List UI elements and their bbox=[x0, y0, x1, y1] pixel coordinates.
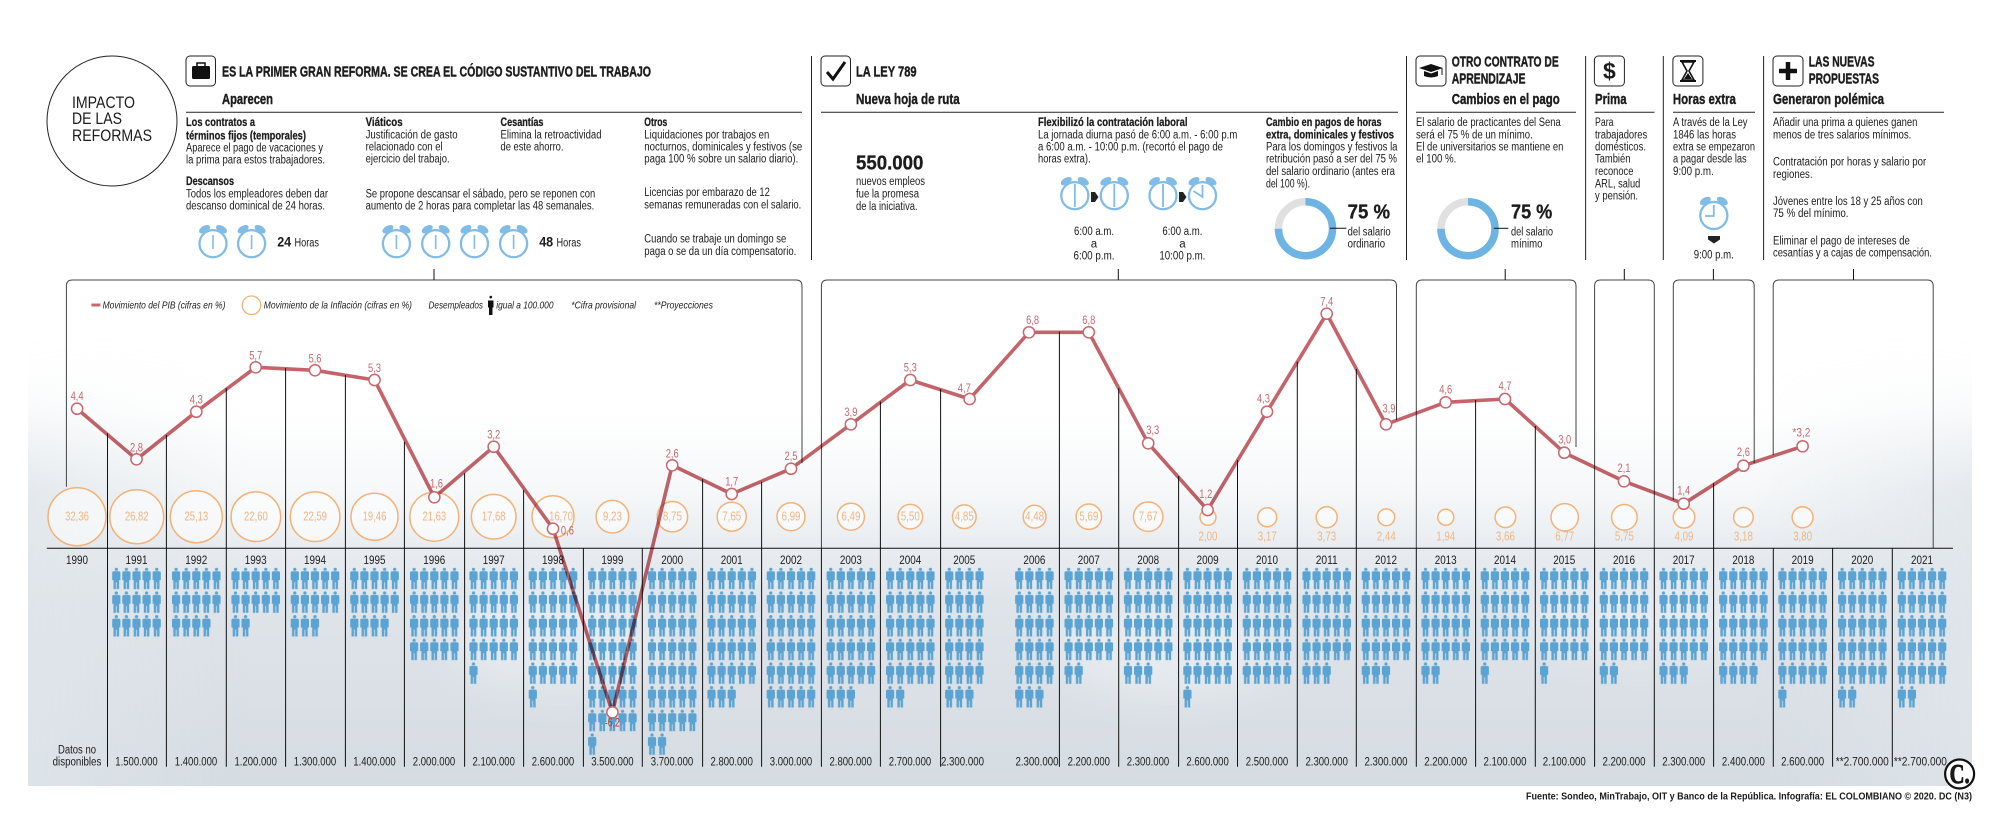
text block: otros: Otros bbox=[644, 117, 667, 129]
panel: las nuevas propuestas bbox=[1773, 55, 1944, 259]
GDP value labels: 3,0 bbox=[1558, 432, 1571, 446]
year labels: 2021 bbox=[1911, 553, 1933, 567]
icon: clocks 48 horas: Horas bbox=[556, 238, 581, 250]
unemployed counts: 2.300.000 bbox=[1127, 756, 1169, 768]
text block: practicantes bbox=[1416, 117, 1563, 166]
GDP value labels: 3,9 bbox=[844, 405, 858, 419]
inflation bubbles: 6,99 bbox=[782, 510, 801, 524]
panel: horas extra bbox=[1673, 56, 1755, 262]
icon: dollar sign: $ bbox=[1603, 58, 1616, 84]
inflation bubbles: 21,63 bbox=[422, 510, 446, 524]
text block: flexibilizo la contratacion: a 6:00 a.m. - 10:00 p.m. (recortó el pago de bbox=[1038, 142, 1223, 154]
GDP value labels: 6,8 bbox=[1082, 313, 1096, 327]
text block: practicantes: El de universitarios se mantiene en bbox=[1416, 142, 1563, 154]
inflation bubbles: 17,68 bbox=[482, 510, 506, 524]
panel: otro contrato de aprendizaje bbox=[1416, 55, 1576, 256]
unemployed counts: 2.400.000 bbox=[1722, 756, 1765, 768]
panel: chart background bbox=[28, 415, 1972, 786]
text block: contratos a termino fijo: términos fijos (temporales) bbox=[186, 130, 306, 142]
text block: otros bbox=[644, 117, 802, 258]
unemployed counts: 1.200.000 bbox=[234, 756, 277, 768]
text block: otros: Licencias por embarazo de 12 bbox=[644, 187, 770, 199]
GDP value labels: 7,4 bbox=[1320, 294, 1333, 308]
year labels: 2010 bbox=[1256, 553, 1278, 567]
inflation bubbles: 19,46 bbox=[363, 510, 386, 524]
chart: donut 75 % salario ordinario: del salario bbox=[1348, 227, 1391, 239]
stat: 550.000 empleos: fue la promesa bbox=[856, 188, 919, 200]
unemployed counts: 1.400.000 bbox=[353, 756, 396, 768]
year labels: 2005 bbox=[953, 553, 976, 567]
text block: cesantias bbox=[500, 117, 602, 154]
unemployed counts: 2.800.000 bbox=[830, 756, 872, 768]
year labels: 1994 bbox=[304, 553, 326, 567]
subheading: nueva hoja de ruta: Nueva hoja de ruta bbox=[856, 92, 960, 108]
GDP value labels: 1,7 bbox=[725, 474, 738, 488]
inflation bubbles: 26,82 bbox=[125, 510, 149, 524]
subheading: generaron polemica: Generaron polémica bbox=[1773, 92, 1885, 108]
inflation bubbles: 5,50 bbox=[901, 510, 920, 524]
inflation bubbles: 3,73 bbox=[1317, 530, 1336, 544]
inflation bubbles: 1,94 bbox=[1436, 530, 1455, 544]
GDP value labels: 5,7 bbox=[249, 348, 262, 362]
logo: El Colombiano: C. bbox=[1950, 759, 1970, 789]
stat: 550.000 empleos: nuevos empleos bbox=[856, 176, 925, 188]
text block: cesantias: Elimina la retroactividad bbox=[500, 129, 602, 141]
GDP value labels: 6,8 bbox=[1026, 313, 1039, 327]
text: horario 6am a 10pm bbox=[1159, 226, 1205, 262]
GDP value labels: 3,2 bbox=[487, 427, 500, 441]
stat: 550.000 empleos: de la iniciativa. bbox=[856, 201, 918, 213]
text: horario 6am a 10pm: 10:00 p.m. bbox=[1159, 250, 1205, 262]
inflation bubbles: 3,18 bbox=[1734, 530, 1753, 544]
chart: donut 75 % salario minimo: 75 % bbox=[1511, 202, 1552, 224]
year labels: 1998 bbox=[542, 553, 564, 567]
unemployed counts: 2.300.000 bbox=[1662, 756, 1705, 768]
heading: otro contrato bbox=[1452, 55, 1559, 87]
year labels: 2008 bbox=[1137, 553, 1159, 567]
unemployed counts: 2.600.000 bbox=[1186, 756, 1229, 768]
unemployed counts: 1.500.000 bbox=[115, 756, 158, 768]
text block: descansos: Descansos bbox=[186, 176, 234, 188]
chart: donut 75 % salario ordinario: ordinario bbox=[1348, 239, 1385, 251]
inflation bubbles: 3,80 bbox=[1793, 530, 1812, 544]
title badge: impacto de las reformas: REFORMAS bbox=[72, 127, 152, 145]
year labels: 2012 bbox=[1375, 553, 1397, 567]
legend: Movimiento de la Inflación (cifras en %) bbox=[264, 299, 412, 311]
legend: igual a 100.000 bbox=[496, 299, 554, 311]
text block: cesantias: de este ahorro. bbox=[500, 142, 564, 154]
year labels: 2009 bbox=[1197, 553, 1219, 567]
stat: 550.000 empleos bbox=[856, 152, 925, 213]
inflation bubbles: 32,36 bbox=[65, 510, 89, 524]
text block: contratos a termino fijo: la prima para estos trabajadores. bbox=[186, 154, 325, 166]
text block: cambio en pagos: retribución pasó a ser del 75 % bbox=[1266, 154, 1397, 166]
year labels: 2003 bbox=[840, 553, 862, 567]
line chart: GDP movement bbox=[77, 314, 1803, 712]
subheading: aparecen: Aparecen bbox=[222, 92, 273, 108]
legend bbox=[91, 296, 714, 315]
GDP value labels: 3,3 bbox=[1146, 423, 1159, 437]
text block: descanso del sabado bbox=[366, 188, 595, 212]
year labels: 2001 bbox=[721, 553, 743, 567]
GDP value labels: 4,3 bbox=[1257, 392, 1270, 406]
text block: propuestas: Contratación por horas y salario por bbox=[1773, 157, 1926, 169]
icon: clock 9 pm: 9:00 p.m. bbox=[1694, 250, 1734, 262]
heading: otro contrato: OTRO CONTRATO DE bbox=[1452, 55, 1559, 71]
inflation bubbles: 2,00 bbox=[1198, 530, 1218, 544]
text block: viaticos bbox=[366, 117, 458, 166]
GDP value labels: 4,7 bbox=[1498, 379, 1512, 393]
text block: otros: semanas remuneradas con el salario. bbox=[644, 200, 801, 212]
year labels: 1992 bbox=[185, 553, 208, 567]
text block: ley 1846: 9:00 p.m. bbox=[1673, 166, 1714, 178]
text block: cambio en pagos: del salario ordinario (antes era bbox=[1266, 166, 1395, 178]
year labels: 2014 bbox=[1494, 553, 1516, 567]
text block: descanso del sabado: aumento de 2 horas para completar las 48 semanales. bbox=[366, 200, 594, 212]
text block: otros: Liquidaciones por trabajos en bbox=[644, 129, 769, 141]
icon: clocks 48 horas bbox=[381, 223, 581, 257]
inflation bubbles: 4,09 bbox=[1674, 530, 1694, 544]
year labels: 1993 bbox=[245, 553, 267, 567]
year labels: 1999 bbox=[601, 553, 624, 567]
year labels: 2017 bbox=[1673, 553, 1695, 567]
year labels: 2013 bbox=[1435, 553, 1457, 567]
text block: trabajadores domesticos: También bbox=[1595, 154, 1630, 166]
GDP value labels: 5,3 bbox=[904, 360, 917, 374]
unemployed counts: 1.400.000 bbox=[175, 756, 217, 768]
panel: primera gran reforma bbox=[186, 56, 802, 258]
heading: otro contrato: APRENDIZAJE bbox=[1452, 71, 1526, 87]
chart: donut 75 % salario minimo: mínimo bbox=[1511, 239, 1542, 251]
subheading: cambios en el pago: Cambios en el pago bbox=[1452, 92, 1560, 108]
heading: ley 789: LA LEY 789 bbox=[856, 65, 917, 81]
unemployed counts: 2.200.000 bbox=[1602, 756, 1646, 768]
unemployed counts: 3.500.000 bbox=[591, 756, 634, 768]
unemployed counts: disponibles bbox=[53, 756, 102, 768]
text block: propuestas: Añadir una prima a quienes ganen bbox=[1773, 117, 1917, 129]
heading: las nuevas propuestas: LAS NUEVAS bbox=[1809, 55, 1875, 71]
title badge: impacto de las reformas bbox=[47, 56, 177, 186]
icon: clock 9 pm bbox=[1694, 195, 1734, 262]
text block: propuestas: menos de tres salarios mínimos. bbox=[1773, 129, 1911, 141]
text block: propuestas bbox=[1773, 117, 1932, 259]
unemployed counts: 2.500.000 bbox=[1246, 756, 1288, 768]
inflation bubbles: 4,48 bbox=[1025, 510, 1044, 524]
panel: ley 789 bbox=[821, 56, 1398, 262]
text block: descansos: descanso dominical de 24 horas. bbox=[186, 200, 325, 212]
GDP value labels: 2,1 bbox=[1618, 461, 1631, 475]
heading: las nuevas propuestas: PROPUESTAS bbox=[1809, 71, 1879, 87]
year labels: 2015 bbox=[1553, 553, 1576, 567]
chart: donut 75 % salario ordinario: 75 % bbox=[1348, 202, 1390, 224]
unemployed counts: 1.300.000 bbox=[294, 756, 336, 768]
unemployed counts: **2.700.000 bbox=[1836, 756, 1889, 768]
text block: cambio en pagos: extra, dominicales y festivos bbox=[1266, 129, 1394, 141]
GDP value labels: 4,4 bbox=[71, 389, 84, 403]
inflation bubbles bbox=[48, 488, 1813, 546]
icon: check mark bbox=[821, 56, 850, 86]
year labels: 2011 bbox=[1316, 553, 1338, 567]
text block: trabajadores domesticos bbox=[1595, 117, 1647, 202]
GDP value labels: 3,9 bbox=[1382, 402, 1396, 416]
unemployed counts: 2.300.000 bbox=[1364, 756, 1408, 768]
GDP value labels: 5,6 bbox=[308, 351, 322, 365]
GDP value labels: 2,8 bbox=[130, 441, 143, 455]
text block: practicantes: el 100 %. bbox=[1416, 154, 1456, 166]
text block: otros: nocturnos, dominicales y festivos (se bbox=[644, 142, 802, 154]
text: horario 6am a 6pm: 6:00 p.m. bbox=[1074, 250, 1114, 262]
pictogram: unemployed people per year bbox=[111, 568, 1947, 757]
GDP value labels: 4,3 bbox=[190, 392, 203, 406]
unemployed counts: 2.200.000 bbox=[1424, 756, 1467, 768]
year labels: 2020 bbox=[1851, 553, 1874, 567]
unemployed counts: 2.300.000 bbox=[1306, 756, 1348, 768]
text block: viaticos: Justificación de gasto bbox=[366, 129, 458, 141]
unemployed counts: 2.100.000 bbox=[1543, 756, 1586, 768]
inflation bubbles: 7,65 bbox=[722, 510, 741, 524]
text block: cambio en pagos: del 100 %). bbox=[1266, 179, 1310, 191]
GDP value labels: 0,6 bbox=[561, 523, 574, 537]
icon: plus bbox=[1773, 56, 1803, 86]
text block: descanso del sabado: Se propone descansar el sábado, pero se reponen con bbox=[366, 188, 595, 200]
text block: contratos a termino fijo: Aparece el pago de vacaciones y bbox=[186, 143, 323, 155]
text block: descansos: Todos los empleadores deben dar bbox=[186, 188, 328, 200]
year labels: 1990 bbox=[66, 553, 88, 567]
text block: ley 1846: a pagar desde las bbox=[1673, 154, 1747, 166]
text block: viaticos: ejercicio del trabajo. bbox=[366, 154, 450, 166]
year labels: 2006 bbox=[1023, 553, 1046, 567]
legend: **Proyecciones bbox=[654, 299, 714, 311]
legend: Desempleados bbox=[428, 299, 484, 311]
unemployed counts: 2.100.000 bbox=[1484, 756, 1526, 768]
GDP value labels: 2,6 bbox=[666, 446, 679, 460]
unemployed counts: 3.000.000 bbox=[770, 756, 812, 768]
GDP value labels: *3,2 bbox=[1792, 426, 1811, 440]
text block: otros: paga o se da un día compensatorio. bbox=[644, 246, 796, 258]
year labels: 2000 bbox=[661, 553, 683, 567]
text: horario 6am a 6pm: 6:00 a.m. bbox=[1074, 226, 1114, 238]
GDP value labels: 1,6 bbox=[430, 476, 443, 490]
year labels bbox=[66, 553, 1933, 567]
text block: trabajadores domesticos: y pensión. bbox=[1595, 190, 1638, 202]
inflation bubbles: 22,60 bbox=[244, 510, 268, 524]
GDP value labels bbox=[71, 294, 1811, 730]
inflation bubbles: 16,70 bbox=[549, 510, 573, 524]
text block: cesantias: Cesantías bbox=[500, 117, 544, 129]
year labels: 1996 bbox=[423, 553, 446, 567]
chart: donut 75 % salario ordinario bbox=[1278, 202, 1391, 256]
unemployed counts: 2.200.000 bbox=[1068, 756, 1110, 768]
inflation bubbles: 9,23 bbox=[603, 510, 622, 524]
text block: otros: Cuando se trabaje un domingo se bbox=[644, 234, 786, 246]
heading: primera reforma: ES LA PRIMER GRAN REFORMA. SE CREA EL CÓDIGO SUSTANTIVO DEL TRABAJO bbox=[222, 63, 651, 81]
unemployed counts: 2.300.000 bbox=[1016, 756, 1058, 768]
text block: flexibilizo la contratacion: horas extra). bbox=[1038, 154, 1091, 166]
unemployed counts: 2.600.000 bbox=[1781, 756, 1824, 768]
inflation bubbles: 6,49 bbox=[841, 510, 860, 524]
text block: ley 1846 bbox=[1673, 117, 1755, 178]
GDP value labels: 1,2 bbox=[1199, 487, 1213, 501]
icon: briefcase bbox=[186, 56, 216, 86]
icon: clocks jornada diurna bbox=[1059, 175, 1218, 209]
text block: practicantes: El salario de practicantes del Sena bbox=[1416, 117, 1561, 129]
text block: contratos a termino fijo: Los contratos a bbox=[186, 117, 255, 129]
text: horario 6am a 10pm: a bbox=[1179, 238, 1186, 250]
icon: clocks 24 horas: Horas bbox=[294, 238, 319, 250]
chart: donut 75 % salario minimo: del salario bbox=[1511, 227, 1553, 239]
text block: propuestas: cesantías y a cajas de compensación. bbox=[1773, 247, 1932, 259]
unemployed counts: 3.700.000 bbox=[651, 756, 693, 768]
subheading: horas extra: Horas extra bbox=[1673, 92, 1737, 108]
unemployed counts: 2.300.000 bbox=[941, 756, 984, 768]
text block: viaticos: Viáticos bbox=[366, 117, 403, 129]
text block: trabajadores domesticos: trabajadores bbox=[1595, 129, 1647, 141]
text block: contratos a termino fijo bbox=[186, 117, 325, 166]
inflation bubbles: 3,66 bbox=[1496, 530, 1515, 544]
text: horario 6am a 6pm bbox=[1074, 226, 1114, 262]
unemployed counts: 2.000.000 bbox=[413, 756, 455, 768]
text block: ley 1846: 1846 las horas bbox=[1673, 129, 1736, 141]
year labels: 2007 bbox=[1078, 553, 1100, 567]
text block: trabajadores domesticos: domésticos. bbox=[1595, 142, 1646, 154]
inflation bubbles: 25,13 bbox=[184, 510, 208, 524]
unemployed counts bbox=[53, 744, 1947, 768]
chart: timeline of GDP, inflation and unemployment bbox=[47, 294, 1953, 768]
GDP value labels: 2,5 bbox=[784, 449, 798, 463]
inflation bubbles: 4,85 bbox=[955, 510, 974, 524]
inflation bubbles: 5,75 bbox=[1615, 530, 1634, 544]
year column rules bbox=[47, 332, 1953, 767]
year labels: 2016 bbox=[1613, 553, 1635, 567]
inflation bubbles: 6,77 bbox=[1555, 530, 1574, 544]
text block: trabajadores domesticos: Para bbox=[1595, 117, 1614, 129]
unemployed counts: **2.700.000 bbox=[1894, 756, 1947, 768]
legend: *Cifra provisional bbox=[571, 299, 637, 311]
subheading: prima: Prima bbox=[1595, 92, 1627, 108]
panel: prima bbox=[1594, 56, 1654, 202]
chart: donut 75 % salario minimo bbox=[1441, 202, 1553, 256]
unemployed counts: 2.800.000 bbox=[710, 756, 753, 768]
text block: cambio en pagos: Cambio en pagos de horas bbox=[1266, 117, 1382, 129]
GDP value labels: 4,6 bbox=[1439, 382, 1452, 396]
text block: cambio en pagos: Para los domingos y festivos la bbox=[1266, 142, 1398, 154]
text block: cambio en pagos bbox=[1266, 117, 1398, 191]
inflation bubbles: 8,75 bbox=[663, 510, 682, 524]
heading: las nuevas propuestas bbox=[1809, 55, 1879, 87]
text block: trabajadores domesticos: ARL, salud bbox=[1595, 178, 1640, 190]
text: horario 6am a 6pm: a bbox=[1091, 238, 1098, 250]
year labels: 2004 bbox=[899, 553, 922, 567]
bracket boxes linking panels to timeline bbox=[66, 269, 1933, 548]
icon: clocks 24 horas bbox=[198, 223, 319, 257]
inflation bubbles: 22,59 bbox=[303, 510, 327, 524]
text: horario 6am a 10pm: 6:00 a.m. bbox=[1162, 226, 1202, 238]
year labels: 1991 bbox=[126, 553, 148, 567]
title badge: impacto de las reformas: DE LAS bbox=[72, 110, 122, 128]
year labels: 2018 bbox=[1732, 553, 1755, 567]
text block: propuestas: 75 % del mínimo. bbox=[1773, 208, 1848, 220]
year labels: 1997 bbox=[483, 553, 505, 567]
text block: propuestas: Eliminar el pago de intereses de bbox=[1773, 235, 1910, 247]
icon: hourglass bbox=[1673, 56, 1703, 86]
text block: ley 1846: extra se empezaron bbox=[1673, 142, 1755, 154]
legend: Movimiento del PIB (cifras en %) bbox=[103, 299, 225, 311]
unemployed counts: 2.600.000 bbox=[532, 756, 574, 768]
inflation bubbles: 7,67 bbox=[1139, 510, 1158, 524]
inflation bubbles: 5,69 bbox=[1079, 510, 1098, 524]
icon: clocks 48 horas: 48 bbox=[539, 234, 553, 250]
text block: propuestas: Jóvenes entre los 18 y 25 años con bbox=[1773, 196, 1923, 208]
unemployed counts: 2.100.000 bbox=[472, 756, 515, 768]
unemployed counts: Datos no bbox=[58, 744, 96, 756]
year labels: 2002 bbox=[780, 553, 802, 567]
text block: propuestas: regiones. bbox=[1773, 169, 1812, 181]
icon: clocks 24 horas: 24 bbox=[277, 234, 291, 250]
text block: trabajadores domesticos: reconoce bbox=[1595, 166, 1633, 178]
icon: graduation cap bbox=[1416, 56, 1446, 86]
inflation bubbles: 2,44 bbox=[1377, 530, 1396, 544]
text block: ley 1846: A través de la Ley bbox=[1673, 117, 1748, 129]
GDP value labels: 1,4 bbox=[1677, 484, 1690, 498]
text block: otros: paga 100 % sobre un salario diario). bbox=[644, 154, 798, 166]
unemployed counts: 2.700.000 bbox=[889, 756, 931, 768]
inflation bubbles: 3,17 bbox=[1258, 530, 1277, 544]
title badge: impacto de las reformas: IMPACTO bbox=[72, 94, 135, 112]
icon: dollar sign bbox=[1594, 56, 1624, 86]
text block: flexibilizo la contratacion: Flexibilizó la contratación laboral bbox=[1038, 117, 1188, 129]
GDP value labels: 2,6 bbox=[1737, 445, 1750, 459]
year labels: 2019 bbox=[1792, 553, 1814, 567]
GDP value labels: -6,2 bbox=[605, 716, 620, 730]
GDP markers bbox=[72, 308, 1808, 718]
text block: descansos bbox=[186, 176, 328, 212]
text block: flexibilizo la contratacion: La jornada diurna pasó de 6:00 a.m. - 6:00 p.m bbox=[1038, 129, 1237, 141]
stat: 550.000 empleos: 550.000 bbox=[856, 152, 923, 174]
GDP value labels: 4,7 bbox=[958, 381, 971, 395]
text block: practicantes: será el 75 % de un mínimo. bbox=[1416, 129, 1533, 141]
year labels: 1995 bbox=[364, 553, 386, 567]
text block: flexibilizo la contratacion bbox=[1038, 117, 1237, 166]
text block: viaticos: relacionado con el bbox=[366, 142, 443, 154]
GDP value labels: 5,3 bbox=[368, 361, 381, 375]
